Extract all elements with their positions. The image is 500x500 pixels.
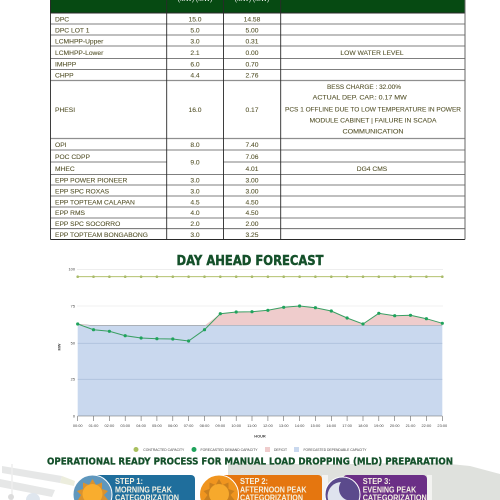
dependable capacity column: 7.06 bbox=[245, 154, 259, 161]
x axis: 14:00 bbox=[295, 423, 305, 428]
remarks column: COMMUNICATION bbox=[342, 129, 404, 136]
plant names: EPP TOPTEAM BONGABONG bbox=[55, 232, 148, 239]
chart legend bbox=[134, 447, 367, 452]
icon: crescent moon bbox=[328, 482, 355, 500]
plant names: EPP POWER PIONEER bbox=[55, 178, 128, 184]
dependable capacity column: 3.25 bbox=[245, 232, 259, 239]
plant names bbox=[55, 16, 148, 239]
plant names: LCMHPP-Upper bbox=[55, 38, 104, 46]
background photo: hills and transmission tower bbox=[0, 463, 500, 500]
dependable capacity column: 0.31 bbox=[245, 38, 259, 46]
contracted capacity column bbox=[188, 16, 202, 239]
dependable capacity column: 0.00 bbox=[245, 50, 259, 57]
y axis labels: 100 bbox=[68, 266, 76, 272]
x axis: 13:00 bbox=[279, 423, 289, 428]
x axis: HOUR bbox=[254, 434, 266, 438]
plant names: CHPP bbox=[55, 72, 74, 80]
remarks column: LOW WATER LEVEL bbox=[340, 50, 404, 57]
deficit area bbox=[205, 306, 442, 325]
plant names: DPC bbox=[55, 16, 69, 24]
contracted capacity line bbox=[76, 275, 444, 278]
table: plant capacity and dependable capacity bbox=[50, 0, 465, 240]
remarks column: BESS CHARGE : 32.00% bbox=[327, 84, 401, 91]
dependable capacity column: 4.01 bbox=[245, 166, 259, 173]
dependable capacity column bbox=[244, 16, 261, 239]
contracted capacity column: 3.0 bbox=[190, 38, 200, 46]
forecasted dependable capacity area bbox=[78, 325, 442, 416]
x axis: 19:00 bbox=[374, 423, 384, 428]
plant names: OPI bbox=[55, 142, 67, 149]
section heading: OPERATIONAL READY PROCESS FOR MANUAL LOAD DROPPING (MLD) PREPARATION bbox=[47, 456, 453, 467]
step 2: afternoon peak: AFTERNOON PEAK bbox=[240, 484, 306, 494]
x axis: 17:00 bbox=[342, 423, 353, 428]
plant names: DPC LOT 1 bbox=[55, 28, 90, 34]
contracted capacity column: 2.0 bbox=[190, 221, 200, 228]
y axis labels bbox=[56, 266, 76, 418]
plant names: EPP SPC ROXAS bbox=[55, 188, 110, 196]
plant names: POC CDPP bbox=[55, 154, 90, 161]
x axis: 22:00 bbox=[422, 423, 432, 428]
x axis: 02:00 bbox=[105, 423, 115, 428]
y axis labels: 50 bbox=[71, 340, 76, 346]
step 1: morning peak: MORNING PEAK bbox=[115, 484, 172, 494]
contracted capacity column: 8.0 bbox=[190, 142, 200, 149]
icon: sun bbox=[77, 479, 108, 500]
area chart: day ahead forecast bbox=[56, 266, 448, 438]
dependable capacity column: 3.00 bbox=[245, 178, 259, 184]
forecasted demand line bbox=[76, 304, 444, 343]
x axis: 03:00 bbox=[120, 423, 131, 428]
contracted capacity column: 15.0 bbox=[188, 16, 202, 24]
x axis: 11:00 bbox=[247, 423, 258, 428]
plant names: EPP TOPTEAM CALAPAN bbox=[55, 200, 135, 206]
contracted capacity column: 3.0 bbox=[190, 188, 200, 196]
x axis: 07:00 bbox=[184, 423, 194, 428]
dependable capacity column: 7.40 bbox=[245, 142, 259, 149]
contracted capacity column: 16.0 bbox=[188, 107, 202, 114]
contracted capacity column: 4.4 bbox=[190, 72, 200, 80]
table column header fragments bbox=[178, 0, 269, 3]
gridlines bbox=[77, 269, 443, 306]
x axis: 04:00 bbox=[136, 423, 147, 428]
y axis labels: 0 bbox=[73, 413, 76, 418]
x axis: 10:00 bbox=[231, 423, 242, 428]
x axis bbox=[73, 416, 448, 438]
chart legend: FORECASTED DEPENDABLE CAPACITY bbox=[304, 447, 367, 452]
contracted capacity column: 9.0 bbox=[190, 160, 200, 166]
dependable capacity column: 5.00 bbox=[245, 28, 259, 34]
step 1: morning peak: STEP 1: bbox=[115, 476, 143, 486]
plant names: MHEC bbox=[55, 166, 75, 173]
x axis: 01:00 bbox=[89, 423, 99, 428]
chart legend: CONTRACTED CAPACITY bbox=[143, 447, 185, 452]
y axis labels: 75 bbox=[71, 303, 75, 308]
step 2: afternoon peak bbox=[200, 475, 322, 500]
plant names: PHESI bbox=[55, 107, 75, 114]
dependable capacity column: 2.76 bbox=[245, 72, 259, 80]
dependable capacity column: 0.70 bbox=[245, 62, 259, 68]
chart legend: FORECASTED DEMAND CAPACITY bbox=[200, 447, 258, 452]
table header band bbox=[50, 0, 465, 13]
x axis: 15:00 bbox=[311, 423, 321, 428]
x axis: 16:00 bbox=[326, 423, 337, 428]
remarks column: ACTUAL DEP. CAP.: 0.17 MW bbox=[313, 94, 407, 101]
chart heading: DAY AHEAD FORECAST bbox=[176, 253, 324, 269]
contracted capacity column: 3.0 bbox=[190, 178, 200, 184]
step 3: evening peak: EVENING PEAK bbox=[363, 484, 416, 494]
dependable capacity column: 2.00 bbox=[245, 221, 259, 228]
step 1: morning peak bbox=[73, 475, 195, 500]
dependable capacity column: 14.58 bbox=[244, 16, 261, 24]
x axis: 21:00 bbox=[406, 423, 416, 428]
step 3: evening peak bbox=[325, 475, 427, 500]
x axis: 18:00 bbox=[358, 423, 369, 428]
x axis: 06:00 bbox=[168, 423, 178, 428]
x axis: 12:00 bbox=[263, 423, 274, 428]
dependable capacity column: 4.50 bbox=[245, 200, 259, 206]
plant names: EPP SPC SOCORRO bbox=[55, 221, 120, 228]
x axis: 05:00 bbox=[152, 423, 163, 428]
x axis: 23:00 bbox=[437, 423, 448, 428]
contracted capacity column: 2.1 bbox=[190, 50, 200, 57]
dependable capacity column: 4.50 bbox=[245, 210, 259, 217]
contracted capacity column: 6.0 bbox=[190, 62, 200, 68]
x axis: 00:00 bbox=[73, 423, 83, 428]
remarks column bbox=[285, 50, 461, 173]
remarks column: MODULE CABINET | FAILURE IN SCADA bbox=[310, 118, 437, 125]
x axis: 09:00 bbox=[215, 423, 226, 428]
x axis: 20:00 bbox=[390, 423, 400, 428]
contracted capacity column: 4.0 bbox=[190, 210, 200, 217]
plant names: EPP RMS bbox=[55, 210, 86, 217]
step 3: evening peak: STEP 3: bbox=[363, 476, 391, 486]
plant names: IMHPP bbox=[55, 62, 77, 68]
y axis labels: MW bbox=[56, 343, 62, 350]
step 2: afternoon peak: STEP 2: bbox=[240, 476, 268, 486]
plant names: LCMHPP-Lower bbox=[55, 50, 104, 57]
remarks column: DG4 CMS bbox=[357, 166, 388, 173]
y axis labels: 25 bbox=[71, 376, 75, 382]
contracted capacity column: 3.0 bbox=[190, 232, 200, 239]
contracted capacity column: 5.0 bbox=[190, 28, 200, 34]
chart legend: DEFICIT bbox=[274, 447, 288, 452]
icon: sun bbox=[204, 479, 234, 500]
x axis: 08:00 bbox=[200, 423, 210, 428]
dependable capacity column: 3.00 bbox=[245, 188, 259, 196]
contracted capacity column: 4.5 bbox=[190, 200, 200, 206]
dependable capacity column: 0.17 bbox=[245, 107, 259, 114]
remarks column: PCS 1 OFFLINE DUE TO LOW TEMPERATURE IN POWER bbox=[285, 107, 461, 114]
